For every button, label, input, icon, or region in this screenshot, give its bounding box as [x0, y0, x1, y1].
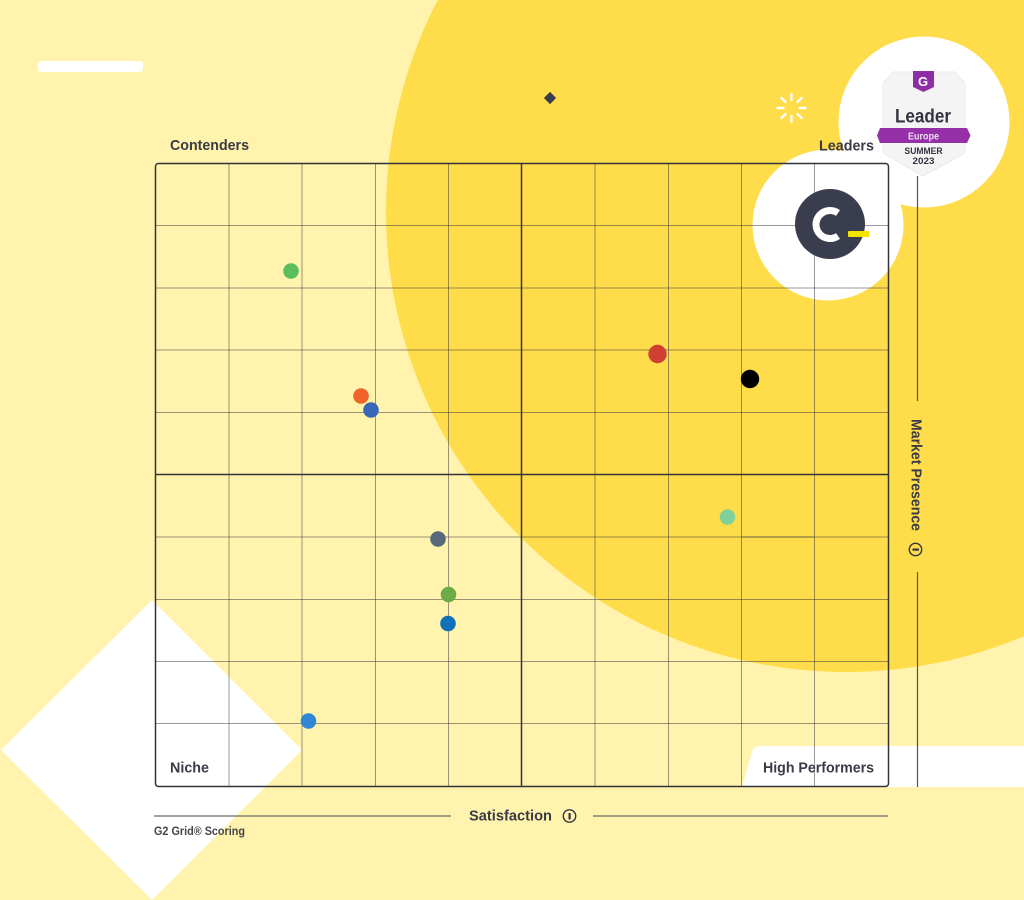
G2 badge: SUMMER — [904, 146, 943, 157]
G2 badge: Leader — [895, 106, 952, 128]
quadrant label: Niche: Niche — [170, 760, 209, 776]
quadrant label: High Performers: High Performers — [763, 760, 874, 776]
white tab behind High Performers — [742, 746, 1024, 787]
x axis: Satisfaction: Satisfaction — [469, 808, 552, 824]
G2 badge — [877, 71, 970, 176]
white circle behind badge — [838, 36, 1010, 208]
y axis: Market Presence: Market Presence — [908, 419, 924, 531]
x axis: Satisfaction — [154, 808, 888, 824]
logo: dark circle with C — [795, 189, 870, 259]
purple G2 tab — [913, 71, 934, 92]
footnote: G2 Grid Scoring: G2 Grid® Scoring — [154, 824, 245, 838]
data points — [283, 263, 759, 729]
sparkle icon — [778, 94, 806, 122]
G2 badge: Europe — [908, 130, 939, 142]
quadrant label: Leaders: Leaders — [819, 138, 874, 154]
G2 badge: 2023 — [912, 156, 934, 167]
quadrant label: Contenders: Contenders — [170, 137, 249, 154]
G2 badge: G — [918, 74, 928, 89]
grid chart — [156, 164, 888, 786]
Europe ribbon — [877, 128, 970, 143]
y axis: Market Presence — [908, 176, 924, 787]
white circle behind logo — [752, 150, 904, 300]
white diamond — [1, 600, 302, 900]
small navy diamond — [544, 92, 556, 104]
white bar top left — [38, 61, 143, 72]
large yellow circle — [386, 0, 1024, 672]
